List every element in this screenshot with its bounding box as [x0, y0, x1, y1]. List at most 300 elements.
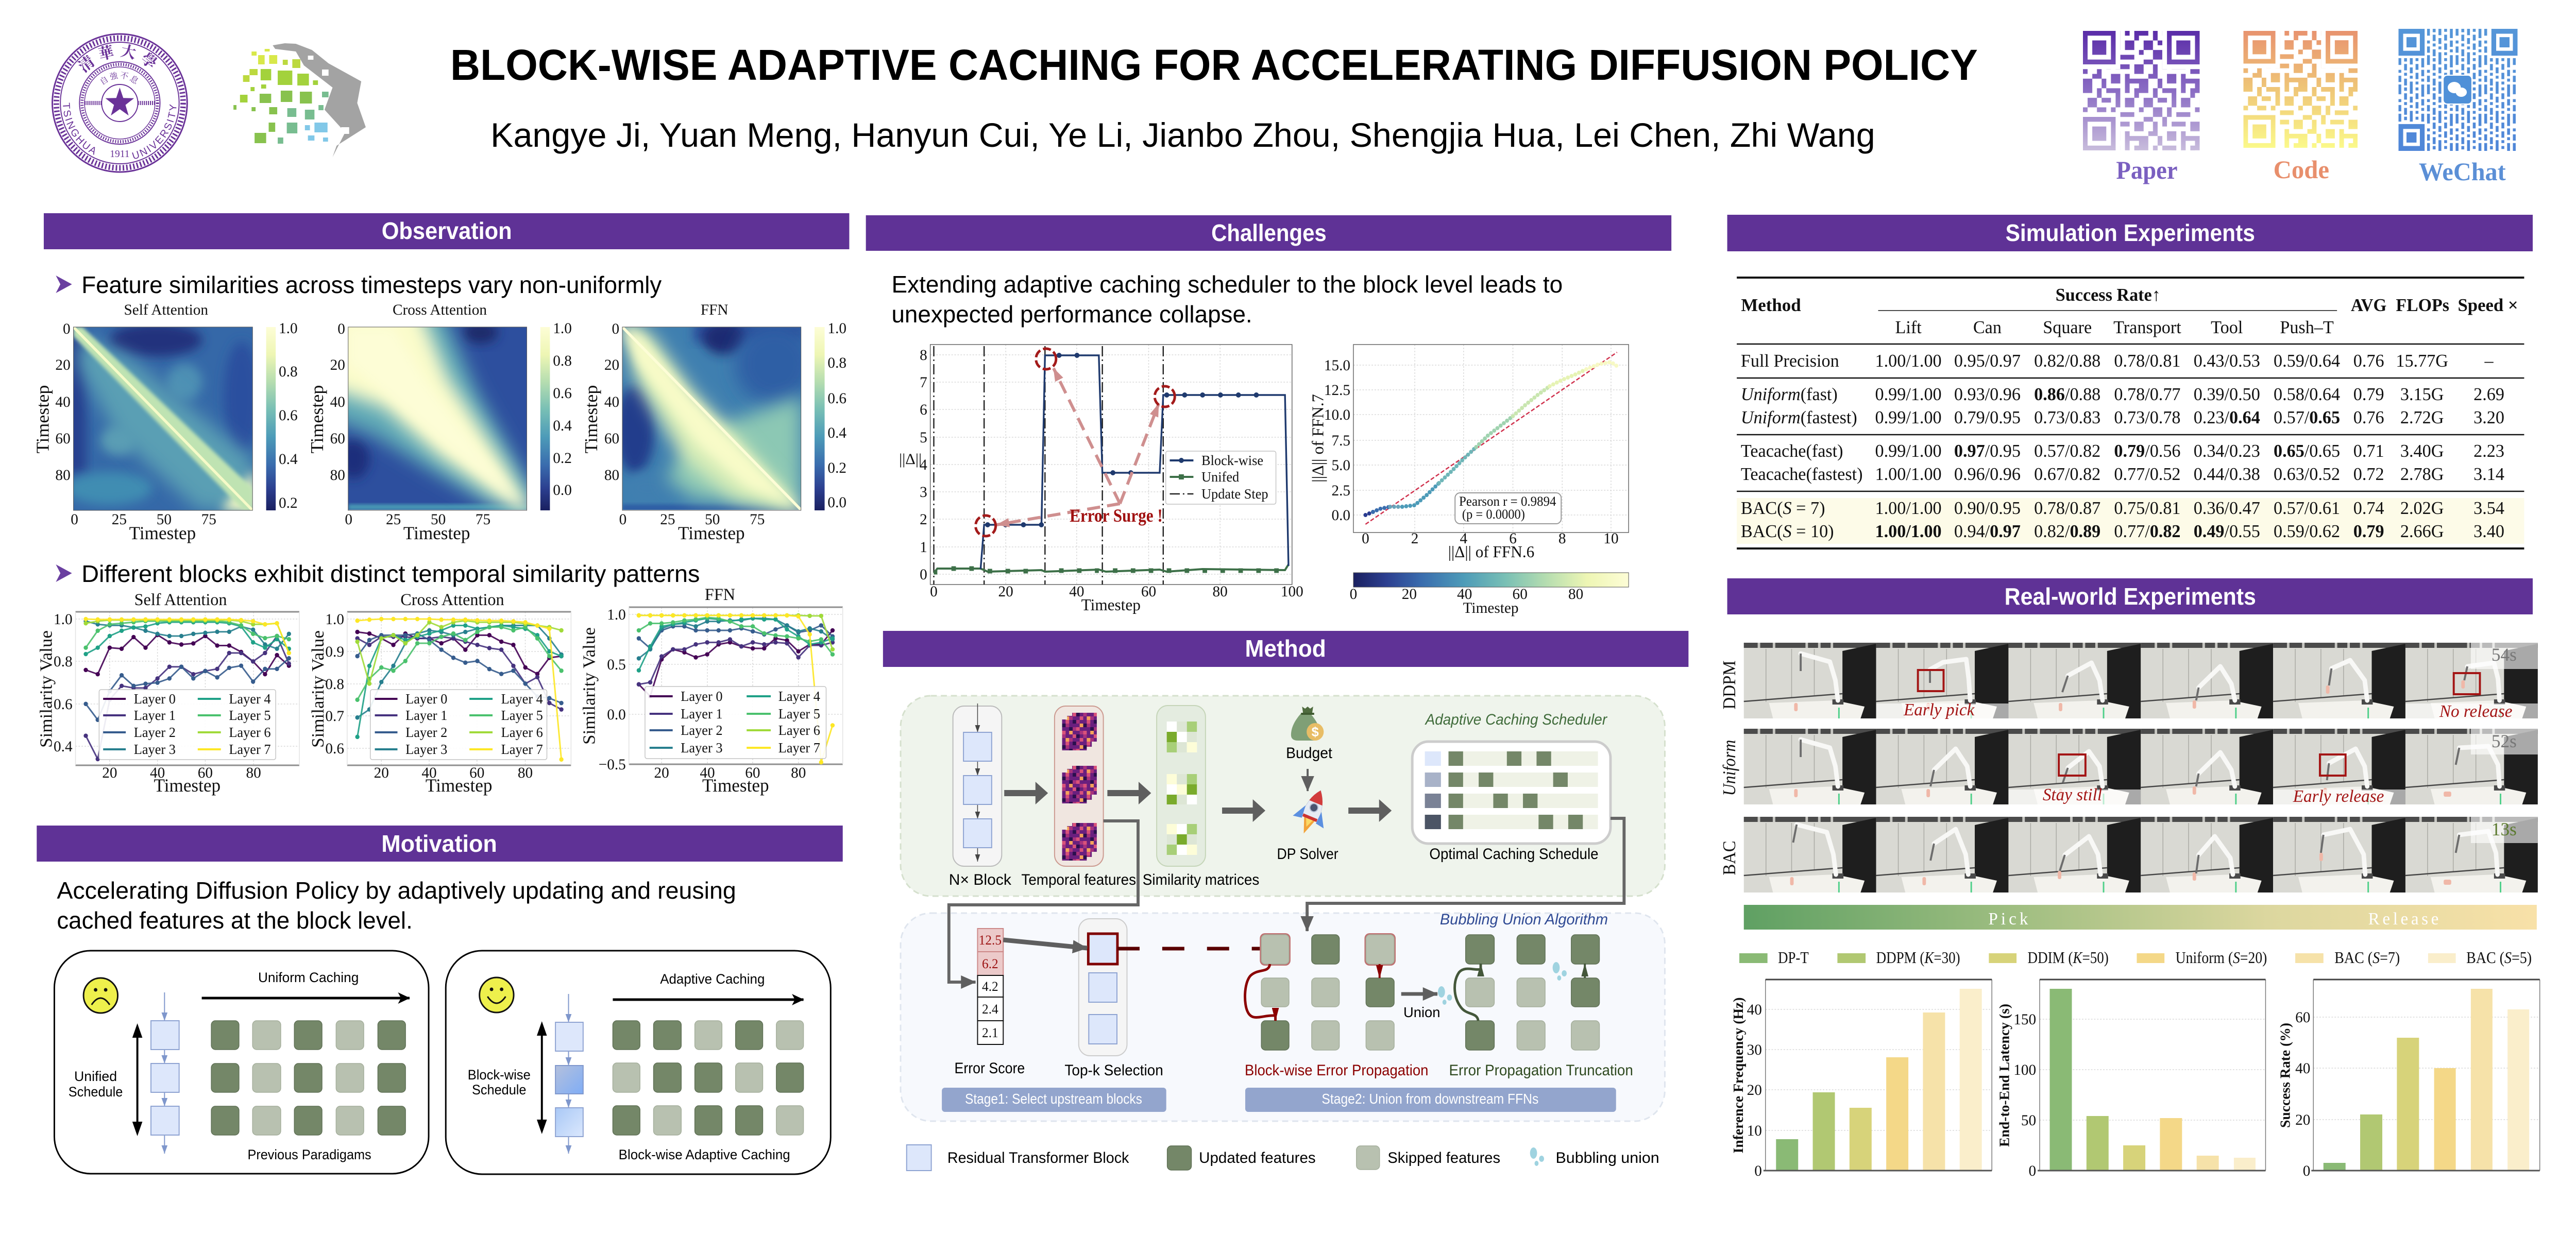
row label: BAC: BAC	[1719, 840, 1739, 876]
colorbar: timestep	[1350, 573, 1629, 616]
heatmap: Cross Attention	[307, 300, 572, 543]
heatmap: FFN: 25	[660, 511, 675, 528]
row: Uniform fastest: Uniform(fastest)	[1741, 408, 1857, 427]
chart: FFN.6 vs FFN.7 scatter: ||Δ|| of FFN.7	[1309, 394, 1327, 483]
feature grid: block-wise error propagation	[1245, 933, 1396, 1050]
photo strip: DDPM robot frames: 54s	[2492, 644, 2517, 665]
row: Uniform fast: 0.58/0.64	[2274, 385, 2340, 404]
heading: Simulation Experiments	[1727, 215, 2533, 251]
line chart: FFN similarity	[580, 586, 843, 796]
icon: sad face	[83, 978, 118, 1013]
logo: Tsinghua University seal: 自強不息	[100, 72, 138, 85]
line chart: FFN similarity: 80	[791, 765, 806, 781]
heading: Challenges	[866, 215, 1671, 251]
bar chart: end-to-end latency: End-to-End Latency (s)	[1996, 1004, 2012, 1147]
error score column	[977, 929, 1003, 1044]
bar chart: inference frequency: 20	[1747, 1082, 1762, 1098]
colorbar: timestep: 0	[1350, 586, 1357, 603]
error score column: 4.2	[982, 979, 998, 994]
legend: layers, cross attention: Layer 7	[501, 742, 543, 757]
row: Teacache fastest: 0.96/0.96	[1954, 465, 2021, 484]
diagram: Adaptive Caching Scheduler	[901, 696, 1665, 896]
logo: lab head silhouette with coloured squares	[233, 43, 366, 157]
legend: bar chart methods: DP-T	[1778, 949, 1809, 967]
chart: FFN.6 vs FFN.7 scatter: 10.0	[1324, 407, 1350, 423]
heatmap: Self Attention: Timestep	[129, 523, 196, 543]
QR code: WeChat: WeChat	[2419, 157, 2506, 186]
row: Teacache fastest: Teacache(fastest)	[1741, 465, 1863, 484]
chart: FFN.6 vs FFN.7 scatter: 7.5	[1331, 433, 1350, 449]
card: block-wise adaptive caching: Schedule	[472, 1082, 526, 1097]
bar chart: success rate: Success Rate (%)	[2277, 1023, 2293, 1128]
optimal caching schedule	[1412, 742, 1611, 844]
logo: Tsinghua University seal: 1911	[110, 148, 130, 160]
heatmap: Self Attention: 0.4	[279, 451, 298, 468]
chart: error surge over timesteps: 20	[998, 583, 1013, 600]
heatmap: Self Attention: 0.6	[279, 407, 298, 424]
row: Teacache fast: 2.23	[2473, 441, 2504, 461]
logo: Tsinghua University seal: 清華大學	[77, 44, 157, 73]
row: Teacache fast	[1741, 441, 2504, 461]
QR code: Code	[2243, 31, 2358, 184]
chart: error surge over timesteps: 40	[1069, 583, 1084, 600]
heatmap: Self Attention: 80	[55, 467, 71, 484]
row: Uniform fast: 0.78/0.77	[2114, 385, 2181, 404]
chart: FFN.6 vs FFN.7 scatter: 10	[1603, 530, 1619, 547]
line chart: Cross Attention similarity: 20	[374, 765, 389, 781]
line chart: FFN similarity: FFN	[705, 586, 735, 604]
line chart: FFN similarity: Timestep	[702, 775, 769, 796]
bullet: different blocks: Different blocks exhibit distinct temporal similarity patterns	[81, 561, 700, 587]
bar chart: inference frequency: 10	[1747, 1123, 1762, 1139]
card: previous paradigms, uniform caching: Unified	[74, 1069, 117, 1084]
legend: layers, FFN: Layer 7	[778, 740, 820, 756]
arrow: temporal features to error score	[949, 821, 1138, 982]
arrow: union: Union	[1403, 1004, 1440, 1020]
row: Uniform fast: 0.93/0.96	[1954, 385, 2021, 404]
row: Teacache fastest: 1.00/1.00	[1875, 465, 1942, 484]
row: Teacache fastest: 2.78G	[2400, 465, 2444, 484]
line chart: Cross Attention similarity: 0.8	[325, 676, 344, 693]
row: BAC S=7: 0.74	[2353, 499, 2384, 518]
stage label 2: Stage2: Union from downstream FFNs	[1321, 1091, 1538, 1107]
legend: block-wise vs unified: Unifed	[1201, 469, 1240, 485]
card: block-wise adaptive caching: Block-wise Adaptive Caching	[619, 1147, 790, 1162]
heatmap: Cross Attention: 0	[345, 511, 352, 528]
heatmap: FFN: 1.0	[827, 320, 846, 337]
QR code: Paper: Paper	[2116, 156, 2178, 184]
error score column: 6.2	[982, 956, 998, 971]
chart: error surge over timesteps: Error Surge !	[1070, 505, 1163, 526]
legend: layers, FFN: Layer 0	[681, 689, 723, 704]
heatmap: FFN: 20	[604, 357, 619, 373]
table header: AVG	[2351, 296, 2386, 315]
line chart: Self Attention similarity: 20	[102, 765, 117, 781]
panel: Method	[883, 631, 1688, 1171]
heatmap: Cross Attention: 0.0	[553, 482, 572, 499]
photo strip: Uniform robot frames: Stay still	[2043, 785, 2102, 804]
row: Full Precision: 0.43/0.53	[2194, 351, 2260, 371]
heading: Method: Method	[1245, 636, 1326, 662]
row: Full Precision: 1.00/1.00	[1875, 351, 1942, 371]
text: challenge statement: unexpected performance collapse.	[891, 301, 1252, 328]
row: BAC S=10: 3.40	[2473, 522, 2504, 541]
legend: bar chart methods: BAC (S=5)	[2466, 949, 2532, 967]
row: BAC S=10	[1741, 522, 2504, 541]
heatmap: Cross Attention: 1.0	[553, 320, 572, 337]
row: Teacache fast: 0.99/1.00	[1875, 441, 1942, 461]
legend: bar chart methods: BAC (S=7)	[2334, 949, 2400, 967]
heading: Observation: Observation	[382, 218, 512, 244]
legend: layers, self attention: Layer 3	[134, 742, 176, 757]
row: BAC S=7: 3.54	[2473, 499, 2504, 518]
similarity matrices column	[1157, 706, 1206, 866]
heading: Real-world Experiments: Real-world Experiments	[2005, 583, 2256, 610]
row: Teacache fastest: 0.67/0.82	[2034, 465, 2100, 484]
panel: Simulation Experiments	[1727, 215, 2533, 548]
row: Full Precision: 0.78/0.81	[2114, 351, 2181, 371]
diagram: Bubbling Union Algorithm: Block-wise Error Propagation	[1245, 1062, 1428, 1079]
row: Teacache fast: 0.57/0.82	[2034, 441, 2100, 461]
bar chart: end-to-end latency: 0	[2028, 1163, 2036, 1179]
logo: Tsinghua University seal	[52, 33, 188, 173]
heatmap: Self Attention: 0	[71, 511, 78, 528]
legend: layers, FFN: Layer 1	[681, 706, 723, 722]
legend: method symbols: Updated features	[1199, 1149, 1316, 1166]
chart: error surge over timesteps: 6	[920, 402, 927, 418]
line chart: Cross Attention similarity: Similarity Value	[308, 630, 328, 748]
row: Uniform fast: 0.79	[2353, 385, 2384, 404]
colorbar: timestep: 60	[1513, 586, 1528, 603]
arrows: pipeline flow	[1004, 782, 1392, 822]
card: block-wise adaptive caching: Block-wise	[468, 1067, 531, 1083]
bar chart: inference frequency	[1730, 980, 1992, 1179]
line chart: FFN similarity: 60	[745, 765, 760, 781]
row: Uniform fast	[1741, 385, 2504, 404]
heading: Simulation Experiments: Simulation Experiments	[2006, 220, 2255, 246]
row: BAC S=7: 0.75/0.81	[2114, 499, 2181, 518]
panel: Challenges	[866, 215, 1671, 616]
row: BAC S=7: 2.02G	[2400, 499, 2444, 518]
row: BAC S=10: 0.59/0.62	[2274, 522, 2340, 541]
diagram: Bubbling Union Algorithm: Top-k Selection	[1064, 1062, 1163, 1079]
heatmap: Cross Attention: 0.2	[553, 450, 572, 467]
row: BAC S=10: 2.66G	[2400, 522, 2444, 541]
chart: error surge over timesteps: 0	[930, 583, 938, 600]
card: previous paradigms, uniform caching: Uniform Caching	[258, 970, 359, 985]
chart: error surge over timesteps: 3	[920, 484, 927, 501]
bar chart: inference frequency: Inference Frequency (Hz)	[1730, 997, 1746, 1154]
icon: budget money bag: $	[1312, 725, 1319, 740]
bar chart: success rate: 0	[2303, 1163, 2310, 1179]
heatmap: Cross Attention: 20	[330, 357, 345, 373]
diagram: Adaptive Caching Scheduler: DP Solver	[1277, 846, 1338, 863]
row: Full Precision: 15.77G	[2396, 351, 2448, 371]
heatmap: Cross Attention: 0.6	[553, 385, 572, 402]
timeline bar: pick to release: Release	[2368, 909, 2438, 929]
line chart: Cross Attention similarity: 0.7	[325, 708, 344, 725]
N x block column	[953, 703, 1002, 866]
feature grid: error propagation truncation	[1455, 935, 1599, 1050]
photo strip: DDPM robot frames: Early pick	[1903, 700, 1975, 719]
heading: Challenges: Challenges	[1211, 220, 1327, 246]
bar chart: success rate: 20	[2295, 1112, 2310, 1128]
row: Full Precision: 0.59/0.64	[2274, 351, 2340, 371]
chart: error surge over timesteps: 4	[920, 457, 927, 473]
legend: bar chart methods: DDPM (K=30)	[1876, 949, 1960, 967]
heatmap: Self Attention: 75	[201, 511, 216, 528]
photo strip: DDPM robot frames: No release	[2439, 702, 2513, 721]
bar chart: inference frequency: 30	[1747, 1042, 1762, 1058]
heatmap: Cross Attention: Cross Attention	[393, 302, 487, 318]
callout: Pearson correlation	[1455, 493, 1561, 524]
chart: FFN.6 vs FFN.7 scatter: 5.0	[1331, 457, 1350, 474]
line chart: Self Attention similarity: 0.8	[54, 654, 73, 670]
legend: layers, self attention: Layer 7	[229, 742, 271, 757]
legend: layers, cross attention: Layer 3	[405, 742, 447, 757]
row: BAC S=7: 0.36/0.47	[2194, 499, 2260, 518]
heatmap: FFN: 75	[750, 511, 765, 528]
heatmap: Self Attention: 0.8	[279, 364, 298, 380]
row: Teacache fastest: 0.72	[2353, 465, 2384, 484]
heading: Real-world Experiments	[1727, 578, 2533, 614]
row: Teacache fast: 3.40G	[2400, 441, 2444, 461]
legend: layers, cross attention: Layer 2	[405, 725, 447, 740]
heatmap: FFN: 0.2	[827, 460, 846, 476]
heatmap: Cross Attention: 60	[330, 431, 345, 447]
heatmap: Self Attention	[32, 302, 298, 543]
bar chart: end-to-end latency: 150	[2013, 1011, 2036, 1028]
legend: layers, FFN	[645, 686, 826, 759]
heatmap: Cross Attention: Timestep	[307, 385, 327, 453]
heatmap: FFN: 0.6	[827, 390, 846, 407]
chart: FFN.6 vs FFN.7 scatter: 2.5	[1331, 483, 1350, 499]
row: Full Precision: –	[2484, 351, 2494, 371]
row: Uniform fastest: 0.23/0.64	[2194, 408, 2260, 427]
row: BAC S=7: 0.90/0.95	[1954, 499, 2021, 518]
timeline bar: pick to release	[1744, 905, 2537, 930]
panel: Motivation	[37, 826, 843, 1174]
legend: layers, self attention	[99, 690, 276, 760]
heatmap: Cross Attention: 40	[330, 394, 345, 410]
bar chart: end-to-end latency	[1996, 980, 2265, 1179]
row: Uniform fastest: 0.79/0.95	[1954, 408, 2021, 427]
card: previous paradigms, uniform caching: Previous Paradigams	[247, 1147, 371, 1162]
row: BAC S=7: 0.57/0.61	[2274, 499, 2340, 518]
row: Uniform fastest: 0.57/0.65	[2274, 408, 2340, 427]
line chart: Self Attention similarity: 0.4	[54, 739, 73, 755]
error score column: 2.4	[982, 1002, 998, 1017]
arrow: schedule to block-wise propagation	[1307, 818, 1624, 931]
chart: error surge over timesteps: 2	[920, 511, 927, 528]
heatmap: Cross Attention: 0.8	[553, 353, 572, 369]
panel: Observation	[32, 213, 849, 796]
heatmap: Self Attention: 25	[112, 511, 127, 528]
stage label 2	[1245, 1088, 1616, 1112]
title: BLOCK-WISE ADAPTIVE CACHING FOR ACCELERATING DIFFUSION POLICY	[450, 41, 1978, 89]
diagram: Adaptive Caching Scheduler: Adaptive Caching Scheduler	[1425, 711, 1607, 728]
card: block-wise adaptive caching	[446, 951, 831, 1174]
row: Full Precision: 0.95/0.97	[1954, 351, 2021, 371]
callout: Pearson correlation: (p = 0.0000)	[1462, 507, 1525, 522]
table: simulation results: Push–T	[2280, 318, 2334, 337]
colorbar: timestep: 80	[1568, 586, 1583, 603]
row: Teacache fast: 0.97/0.95	[1954, 441, 2021, 461]
photo strip: BAC robot frames	[1744, 817, 2538, 892]
heatmap: FFN: 0.0	[827, 494, 846, 511]
heatmap: FFN	[581, 302, 846, 543]
heatmap: FFN: 0.8	[827, 355, 846, 371]
bar chart: inference frequency: 0	[1754, 1163, 1762, 1179]
chart: FFN.6 vs FFN.7 scatter: 8	[1558, 530, 1566, 547]
row: Uniform fast: 0.39/0.50	[2194, 385, 2260, 404]
line chart: Self Attention similarity: Self Attention	[134, 591, 227, 609]
heatmap: Cross Attention: 25	[386, 511, 401, 528]
legend: layers, cross attention: Layer 1	[405, 708, 447, 723]
line chart: Cross Attention similarity: 0.6	[325, 741, 344, 757]
legend: layers, FFN: Layer 5	[778, 706, 820, 722]
line chart: Cross Attention similarity: 60	[469, 765, 484, 781]
heatmap: FFN: Timestep	[581, 385, 601, 453]
legend: layers, self attention: Layer 4	[229, 691, 271, 707]
table: simulation results: Lift	[1895, 318, 1922, 337]
line chart: Cross Attention similarity: 80	[518, 765, 533, 781]
heatmap: Self Attention: 50	[157, 511, 172, 528]
diagram: Bubbling Union Algorithm	[901, 911, 1665, 1121]
heatmap: Cross Attention: 0.4	[553, 418, 572, 434]
line chart: Self Attention similarity: 0.6	[54, 696, 73, 713]
heading: Motivation	[37, 826, 843, 862]
text: motivation statement: Accelerating Diffusion Policy by adaptively updating and reusing	[57, 878, 736, 904]
diagram: Adaptive Caching Scheduler: N× Block	[949, 871, 1011, 888]
chart: error surge over timesteps: 0	[920, 566, 927, 583]
chart: error surge over timesteps: 5	[920, 430, 927, 446]
row: BAC S=7: 1.00/1.00	[1875, 499, 1942, 518]
panel: Real-world Experiments	[1719, 578, 2540, 1179]
diagram: Adaptive Caching Scheduler: Budget	[1286, 745, 1333, 762]
heatmap: FFN: FFN	[701, 302, 728, 318]
legend: layers, self attention: Layer 2	[134, 725, 176, 740]
bar chart: success rate	[2277, 980, 2540, 1179]
line chart: FFN similarity: 40	[700, 765, 715, 781]
chart: FFN.6 vs FFN.7 scatter: 6	[1509, 530, 1517, 547]
table: simulation results: Square	[2043, 318, 2092, 337]
diagram: Bubbling Union Algorithm: Error Score	[955, 1060, 1025, 1077]
line chart: Cross Attention similarity: 0.9	[325, 644, 344, 660]
row label: DDPM: DDPM	[1719, 660, 1739, 710]
QR code: Paper	[2083, 31, 2200, 184]
table header: Speed ×	[2458, 296, 2518, 315]
chart: error surge over timesteps	[899, 345, 1303, 614]
heatmap: FFN: 50	[705, 511, 720, 528]
icon: DP solver rocket	[1289, 784, 1336, 840]
bar chart: success rate: 60	[2295, 1009, 2310, 1026]
line chart: Cross Attention similarity: 1.0	[325, 611, 344, 628]
row: BAC S=10: 0.82/0.89	[2034, 522, 2100, 541]
legend: layers, self attention: Layer 0	[134, 691, 176, 707]
heatmap: Cross Attention: 80	[330, 467, 345, 484]
QR code: WeChat	[2398, 29, 2518, 186]
heatmap: FFN: 80	[604, 467, 619, 484]
heatmap: Self Attention: Timestep	[32, 385, 53, 453]
row label: Uniform: Uniform	[1719, 740, 1739, 796]
row: BAC S=10: 0.49/0.55	[2194, 522, 2260, 541]
chart: error surge over timesteps: 100	[1281, 583, 1303, 600]
heatmap: Cross Attention: Timestep	[403, 523, 470, 543]
chart: error surge over timesteps: 1	[920, 539, 927, 556]
heatmap: Self Attention: 0.2	[279, 495, 298, 511]
text: motivation statement: cached features at the block level.	[57, 907, 413, 934]
text: challenge statement: Extending adaptive caching scheduler to the block level leads to	[891, 271, 1563, 298]
diagram: Bubbling Union Algorithm: Error Propagation Truncation	[1449, 1062, 1633, 1079]
line chart: Cross Attention similarity: Cross Attention	[400, 591, 504, 609]
row: Uniform fastest: 3.20	[2473, 408, 2504, 427]
chart: error surge over timesteps: Timestep	[1081, 596, 1141, 614]
row: BAC S=10: 1.00/1.00	[1875, 522, 1942, 541]
card: previous paradigms, uniform caching: Schedule	[69, 1084, 123, 1100]
legend: bar chart methods: Uniform (S=20)	[2176, 949, 2267, 967]
heatmap: FFN: 40	[604, 394, 619, 410]
row: Uniform fast: 3.15G	[2400, 385, 2444, 404]
line chart: Self Attention similarity: 80	[246, 765, 261, 781]
row: BAC S=7: BAC(S = 7)	[1741, 499, 1825, 518]
legend: bar chart methods	[1739, 949, 2532, 967]
legend: layers, FFN: Layer 4	[778, 689, 820, 704]
heatmap: Self Attention: 40	[55, 394, 71, 410]
chart: FFN.6 vs FFN.7 scatter: 2	[1411, 530, 1418, 547]
heatmap: Self Attention: 20	[55, 357, 71, 373]
chart: FFN.6 vs FFN.7 scatter: 15.0	[1324, 357, 1350, 374]
heatmap: Self Attention: 60	[55, 431, 71, 447]
row: Uniform fastest: 0.76	[2353, 408, 2384, 427]
line chart: Self Attention similarity: 1.0	[54, 611, 73, 628]
row: BAC S=7: 0.78/0.87	[2034, 499, 2100, 518]
legend: layers, cross attention: Layer 0	[405, 691, 447, 707]
legend: layers, self attention: Layer 5	[229, 708, 271, 723]
logo: Tsinghua University seal: TSINGHUA UNIVERSITY	[63, 102, 176, 159]
legend: block-wise vs unified	[1166, 451, 1276, 504]
row: Uniform fast: Uniform(fast)	[1741, 385, 1838, 404]
legend: layers, cross attention: Layer 6	[501, 725, 543, 740]
chart: error surge over timesteps: 80	[1213, 583, 1228, 600]
heading: Observation	[44, 213, 849, 249]
row: Full Precision: 0.76	[2353, 351, 2384, 371]
heading: Method	[883, 631, 1688, 667]
QR code: Code: Code	[2274, 155, 2329, 184]
heatmap: Cross Attention: 0	[337, 321, 345, 337]
temporal features column	[1055, 706, 1104, 866]
row: Teacache fastest: 3.14	[2473, 465, 2504, 484]
heatmap: Self Attention: 1.0	[279, 320, 298, 337]
error score column: 12.5	[979, 933, 1002, 948]
row: BAC S=10: 0.79	[2353, 522, 2384, 541]
row: Teacache fastest: 0.44/0.38	[2194, 465, 2260, 484]
heatmap: FFN: 60	[604, 431, 619, 447]
line chart: Cross Attention similarity: 40	[421, 765, 437, 781]
table: simulation results: Transport	[2113, 318, 2181, 337]
diagram: Adaptive Caching Scheduler: Similarity matrices	[1143, 871, 1259, 888]
text: motivation statement	[57, 878, 736, 934]
chart: error surge over timesteps: 8	[920, 347, 927, 364]
colorbar: timestep: Timestep	[1463, 600, 1519, 616]
line chart: FFN similarity: 0.5	[607, 657, 626, 673]
heatmap: Cross Attention: 50	[431, 511, 446, 528]
table: simulation results: Tool	[2211, 318, 2243, 337]
text: challenge statement	[891, 271, 1563, 328]
table: simulation results	[1737, 278, 2524, 548]
line chart: Self Attention similarity: 40	[150, 765, 165, 781]
arrow: union	[1401, 986, 1452, 1020]
